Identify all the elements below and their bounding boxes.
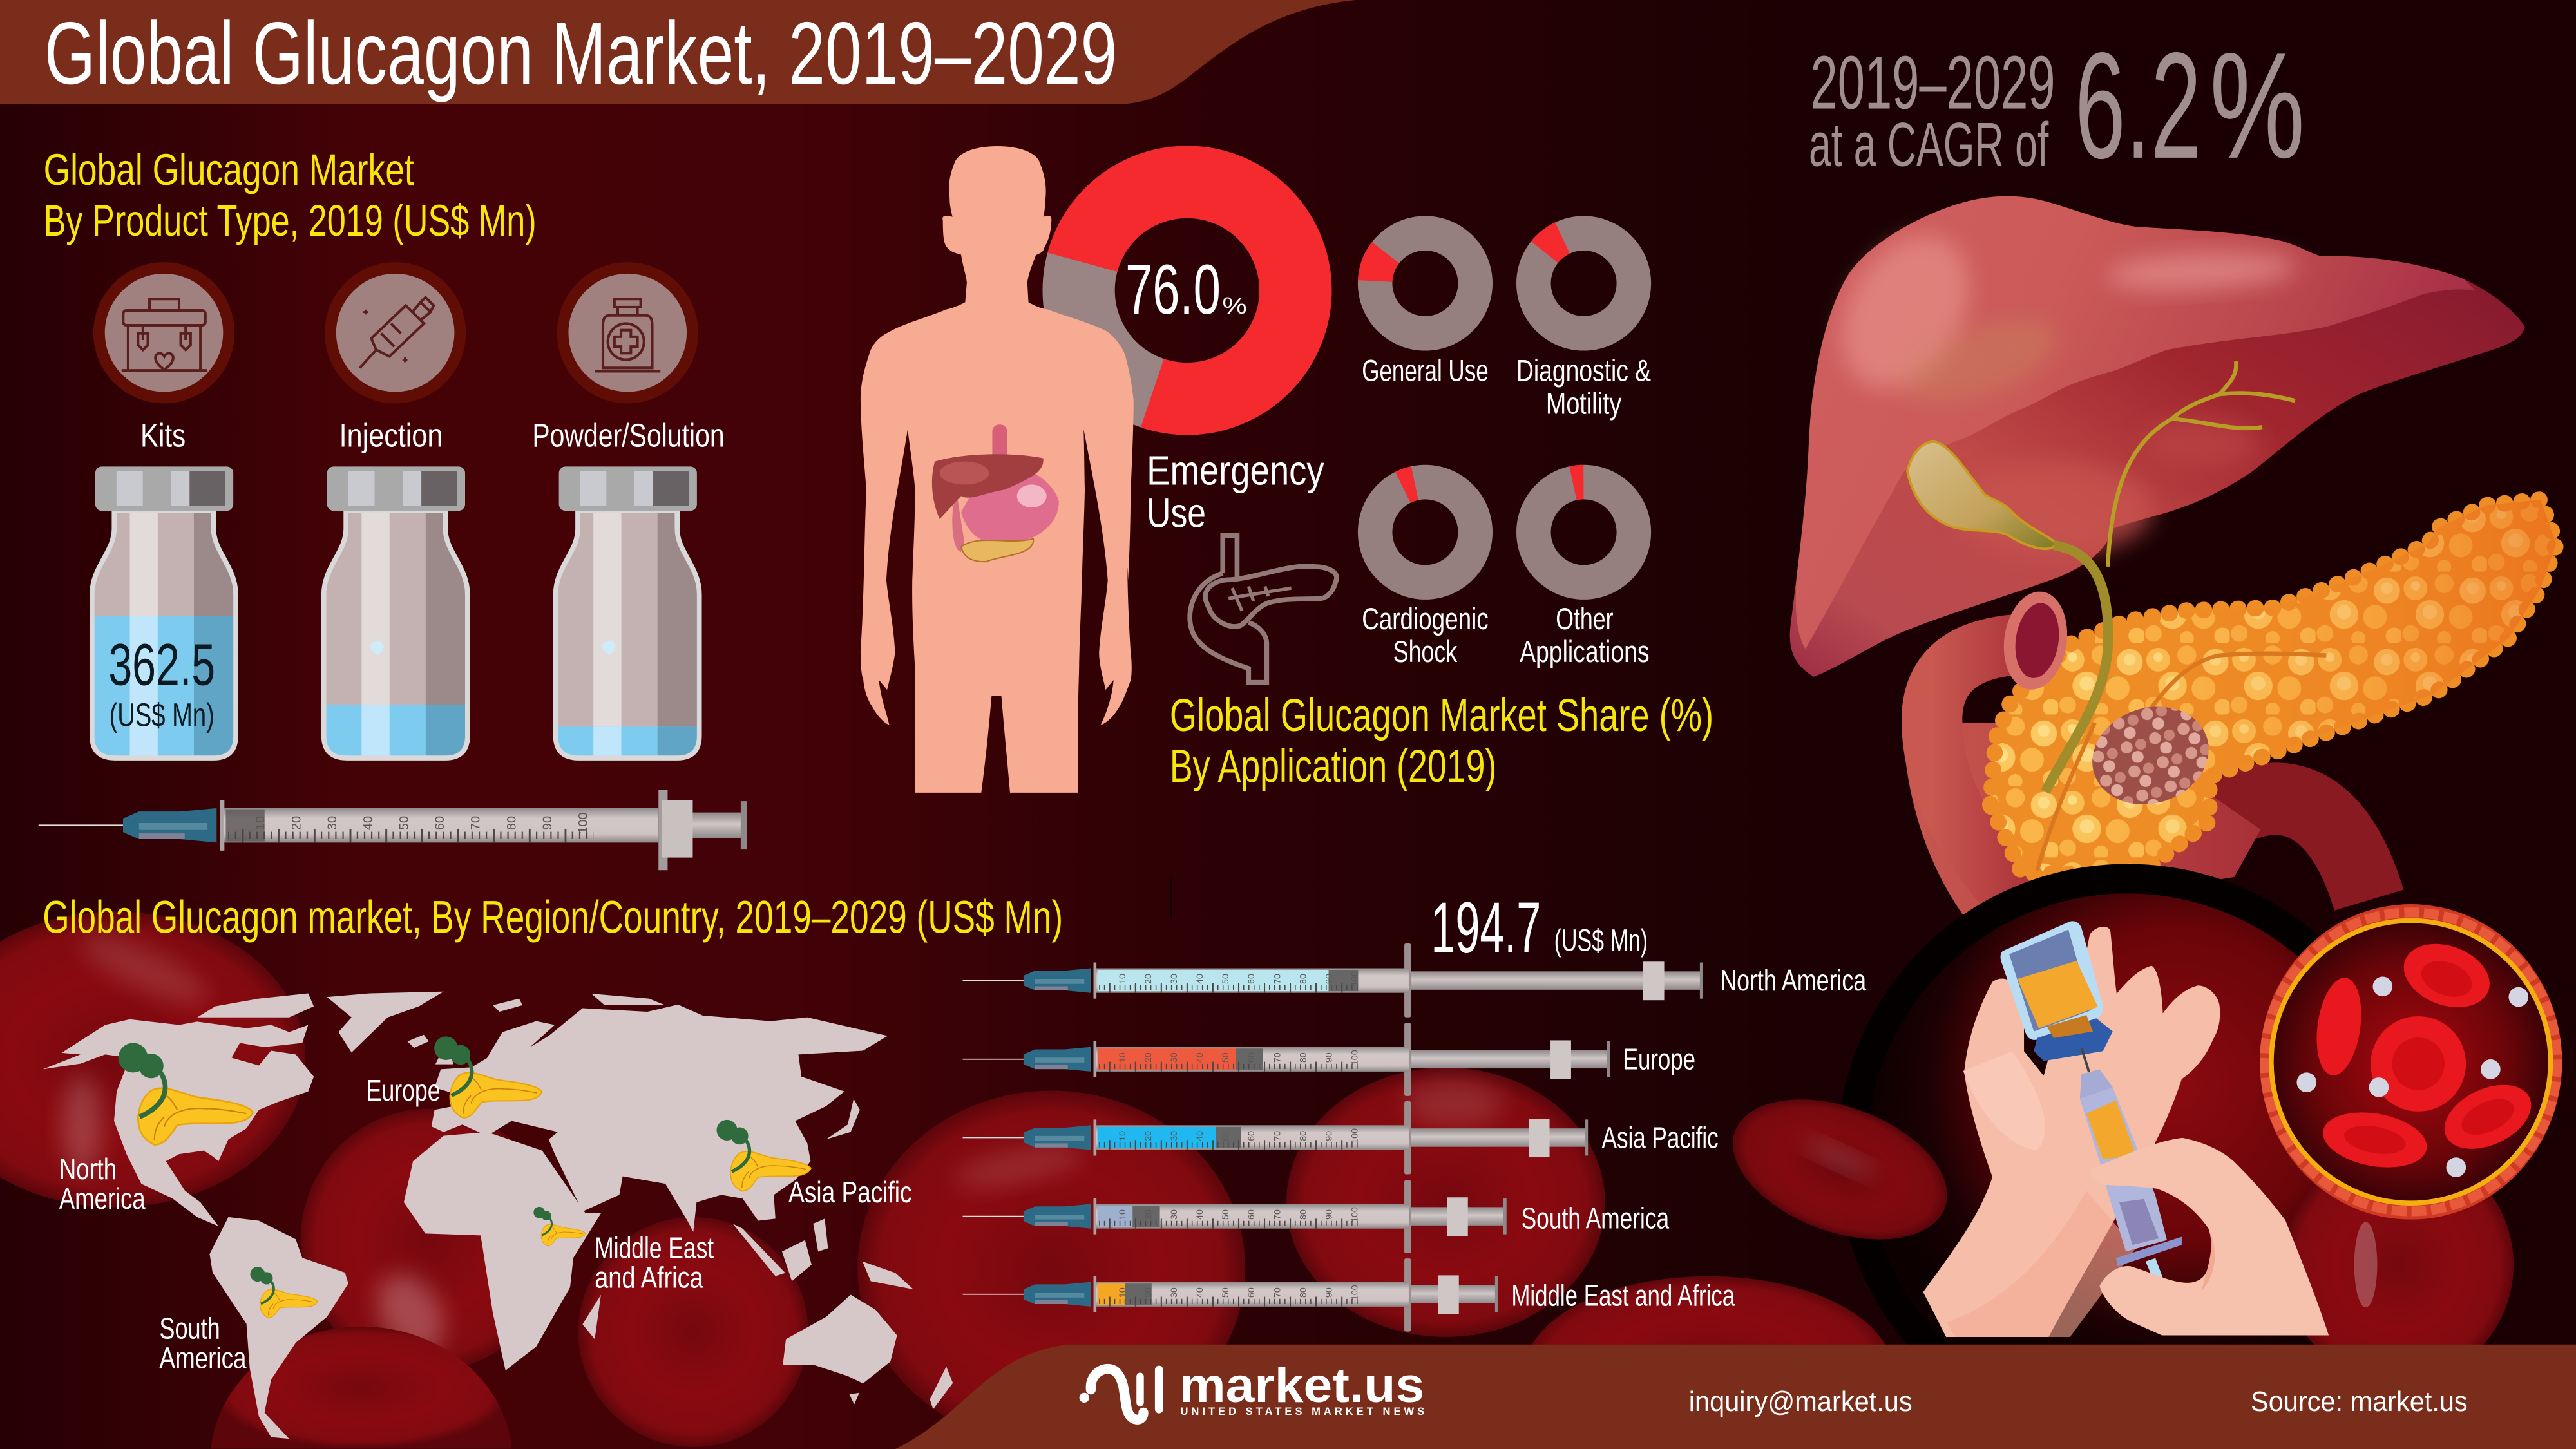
vial: injection	[321, 466, 470, 761]
illustration: injection lens	[1713, 878, 2562, 1430]
label: injection: Injection	[339, 417, 443, 454]
label: middle east and africa	[595, 1231, 714, 1294]
label: middle east and africa: Middle East	[595, 1231, 714, 1265]
syringe: middle east and africa: 60	[1246, 1287, 1257, 1298]
pancreas	[1990, 500, 2556, 874]
syringe: north america: 40	[1195, 974, 1205, 984]
icon: powder/solution	[557, 262, 698, 403]
callout: cagr: at a CAGR of	[1809, 109, 2049, 180]
tumour	[2079, 692, 2222, 819]
syringe: europe: 40	[1195, 1052, 1205, 1063]
label: other applications	[1520, 601, 1650, 668]
syringe: decorative top	[39, 790, 747, 870]
syringe: decorative top: 50	[397, 816, 411, 830]
syringe: asia pacific: 30	[1169, 1131, 1179, 1141]
donut: general use	[1373, 231, 1478, 336]
syringe: south america: 80	[1298, 1209, 1308, 1220]
syringe: decorative top: 70	[469, 816, 483, 830]
syringe: europe: 90	[1324, 1052, 1334, 1063]
syringe: asia pacific: 50	[1221, 1131, 1231, 1141]
blood cell: under vessel	[2284, 1146, 2514, 1383]
label: north america: America	[59, 1182, 146, 1215]
syringe: asia pacific: 90	[1324, 1131, 1334, 1141]
blood cells backdrop	[0, 877, 1893, 1448]
label: emergency use: Emergency	[1147, 447, 1324, 493]
donut value: %	[1222, 293, 1247, 319]
syringe: middle east and africa: 40	[1195, 1287, 1205, 1298]
syringe: north america: 100	[1350, 971, 1360, 987]
label: north america: North	[59, 1152, 117, 1186]
value: north america: (US$ Mn)	[1554, 923, 1648, 958]
marker: asia pacific	[716, 1120, 811, 1191]
label: powder/solution: Powder/Solution	[532, 417, 725, 454]
label: cardiogenic shock: Cardiogenic	[1362, 601, 1489, 636]
logo mark	[1082, 1369, 1159, 1419]
footer: inquiry: inquiry@market.us	[1689, 1387, 1913, 1417]
syringe: north america: 60	[1246, 974, 1257, 984]
syringe: decorative top: 80	[504, 816, 519, 830]
syringe: europe: 20	[1143, 1052, 1154, 1063]
syringe: decorative top: 10	[254, 816, 268, 830]
marker: middle east and africa	[533, 1207, 586, 1246]
logo: market.us	[1082, 1358, 1424, 1419]
label: south america: South	[159, 1312, 220, 1345]
syringe: europe: 10	[1118, 1052, 1128, 1063]
label: europe row: Europe	[1623, 1042, 1695, 1075]
organs in body	[932, 424, 1059, 562]
syringe: south america: 90	[1324, 1209, 1334, 1220]
marker: north america	[119, 1043, 253, 1145]
syringe: north america: 50	[1221, 974, 1231, 984]
label: europe: Europe	[367, 1074, 441, 1107]
heading: region: Global Glucagon market, By Region/Country, 2019–2029 (US$ Mn)	[43, 892, 1063, 943]
syringe: asia pacific: 80	[1298, 1131, 1308, 1141]
syringe: middle east and africa: 80	[1298, 1287, 1308, 1298]
heading: product type	[44, 145, 537, 245]
label: emergency use	[1147, 447, 1324, 536]
label: diagnostic and motility: Diagnostic &	[1516, 354, 1651, 388]
liver	[1790, 196, 2525, 677]
syringe: middle east and africa: 50	[1221, 1287, 1231, 1298]
syringe: middle east and africa: 30	[1169, 1287, 1179, 1298]
syringe: decorative top: 100	[577, 812, 591, 834]
heading: application: Global Glucagon Market Share (%)	[1170, 690, 1713, 741]
panel: product type	[82, 262, 725, 773]
callout: cagr: 2019–2029	[1811, 40, 2056, 124]
label: north america row: North America	[1720, 963, 1867, 997]
syringe in hand	[2080, 1048, 2182, 1284]
donut: diagnostic and motility	[1513, 213, 1654, 354]
syringe: north america: 10	[1118, 974, 1128, 984]
landmasses	[43, 992, 953, 1439]
syringe: decorative top: 60	[433, 816, 447, 830]
label: south america: America	[159, 1341, 247, 1374]
syringe: asia pacific: 70	[1272, 1131, 1283, 1141]
syringe: decorative top: 30	[325, 816, 339, 830]
syringe: asia pacific: 60	[1246, 1131, 1257, 1141]
blood cell: left of lens	[1713, 1073, 1967, 1266]
marker: europe	[434, 1036, 542, 1118]
syringe: south america	[963, 1197, 1507, 1236]
syringe: middle east and africa: 70	[1272, 1287, 1283, 1298]
syringe: asia pacific: 10	[1118, 1131, 1128, 1141]
world map	[43, 992, 953, 1439]
logo tagline: UNITED STATES MARKET NEWS	[1180, 1405, 1424, 1417]
syringe: south america: 20	[1143, 1209, 1154, 1220]
dashed axis	[1404, 943, 1411, 1332]
syringe: asia pacific	[963, 1119, 1588, 1157]
right hand	[2090, 1138, 2329, 1335]
value: north america: 194.7	[1431, 887, 1541, 968]
label: cardiogenic shock: Shock	[1393, 634, 1458, 668]
marker: south america	[250, 1267, 318, 1318]
label: cardiogenic shock	[1362, 601, 1489, 668]
label: asia pacific: Asia Pacific	[788, 1175, 911, 1209]
vial in hand	[2001, 921, 2113, 1061]
label: general use: General Use	[1362, 354, 1489, 388]
duodenum opening	[1998, 587, 2074, 694]
syringe: europe: 100	[1350, 1050, 1360, 1065]
donut: emergency use	[1054, 157, 1321, 424]
syringe: middle east and africa	[963, 1275, 1498, 1314]
donut value: 76.0	[1125, 251, 1221, 329]
label: emergency use: Use	[1147, 490, 1206, 536]
vessel with blood cells	[2260, 904, 2562, 1220]
footer band	[895, 1345, 2576, 1449]
syringe: middle east and africa: 100	[1350, 1285, 1360, 1300]
label: other applications: Other	[1556, 601, 1613, 636]
callout: cagr	[1809, 21, 2305, 190]
header band	[0, 0, 1355, 104]
donut: cardiogenic shock	[1358, 465, 1492, 599]
syringe: decorative top: 20	[289, 816, 303, 830]
syringe: asia pacific: 40	[1195, 1131, 1205, 1141]
label: middle east and africa: and Africa	[595, 1261, 703, 1294]
syringe: north america: 90	[1324, 974, 1334, 984]
chart: application donuts	[861, 146, 1654, 793]
syringe: south america: 10	[1118, 1209, 1128, 1220]
syringe: decorative top: 40	[361, 816, 376, 830]
label: south america row: South America	[1522, 1202, 1670, 1235]
syringe: south america: 70	[1272, 1209, 1283, 1220]
label: middle east row: Middle East and Africa	[1511, 1279, 1735, 1312]
bile duct	[2045, 361, 2295, 791]
syringe: south america: 40	[1195, 1209, 1205, 1220]
callout: cagr: 6.2	[2075, 21, 2202, 190]
syringe: south america: 50	[1221, 1209, 1231, 1220]
silhouette: human body	[861, 146, 1134, 793]
callout: cagr: %	[2209, 21, 2305, 190]
syringe: north america: 80	[1298, 974, 1308, 984]
vial: powder/solution	[553, 466, 702, 761]
syringe: europe: 80	[1298, 1052, 1308, 1063]
syringe: south america: 100	[1350, 1207, 1360, 1222]
syringe: north america: 20	[1143, 974, 1154, 984]
syringe: middle east and africa: 90	[1324, 1287, 1334, 1298]
heading: application	[1170, 690, 1713, 792]
heading: product type: Global Glucagon Market	[44, 145, 414, 194]
value: 362.5	[108, 632, 215, 698]
footer: source: Source: market.us	[2251, 1387, 2468, 1417]
syringe: europe: 70	[1272, 1052, 1283, 1063]
icon: kits	[93, 262, 234, 403]
label: south america	[159, 1312, 247, 1374]
label: diagnostic and motility: Motility	[1546, 386, 1622, 421]
syringe: decorative top: 90	[540, 816, 555, 830]
syringe: north america	[963, 961, 1703, 1000]
lens ring	[1851, 878, 2403, 1430]
icon: pancreas outline	[1190, 535, 1337, 683]
label: diagnostic and motility	[1516, 354, 1651, 421]
heading: product type: By Product Type, 2019 (US$ Mn)	[44, 196, 537, 245]
chart: syringes by region	[963, 887, 1867, 1332]
heading: application: By Application (2019)	[1170, 741, 1496, 792]
syringe: europe	[963, 1040, 1610, 1079]
gallbladder	[1907, 442, 2057, 549]
title: Global Glucagon Market, 2019–2029	[44, 4, 1117, 103]
syringe: north america: 70	[1272, 974, 1283, 984]
syringe: north america: 30	[1169, 974, 1179, 984]
syringe: middle east and africa: 20	[1143, 1287, 1154, 1298]
vial: kits	[90, 466, 238, 761]
left hand	[1923, 927, 2220, 1337]
syringe: asia pacific: 100	[1350, 1128, 1360, 1144]
duodenum	[1902, 644, 2369, 920]
syringe: europe: 30	[1169, 1052, 1179, 1063]
syringe: europe: 60	[1246, 1052, 1257, 1063]
donut: other applications	[1524, 473, 1643, 592]
syringe: south america: 60	[1246, 1209, 1257, 1220]
syringe: asia pacific: 20	[1143, 1131, 1154, 1141]
label: other applications: Applications	[1520, 634, 1650, 668]
syringe: middle east and africa: 10	[1118, 1287, 1128, 1298]
illustration: liver and pancreas	[1790, 196, 2556, 920]
syringe: south america: 30	[1169, 1209, 1179, 1220]
label: kits: Kits	[140, 417, 186, 454]
unit: (US$ Mn)	[110, 696, 215, 733]
icon: injection	[325, 262, 466, 403]
label: asia pacific row: Asia Pacific	[1602, 1121, 1719, 1155]
syringe: europe: 50	[1221, 1052, 1231, 1063]
label: north america	[59, 1152, 146, 1215]
logo text: market.us	[1179, 1358, 1424, 1413]
